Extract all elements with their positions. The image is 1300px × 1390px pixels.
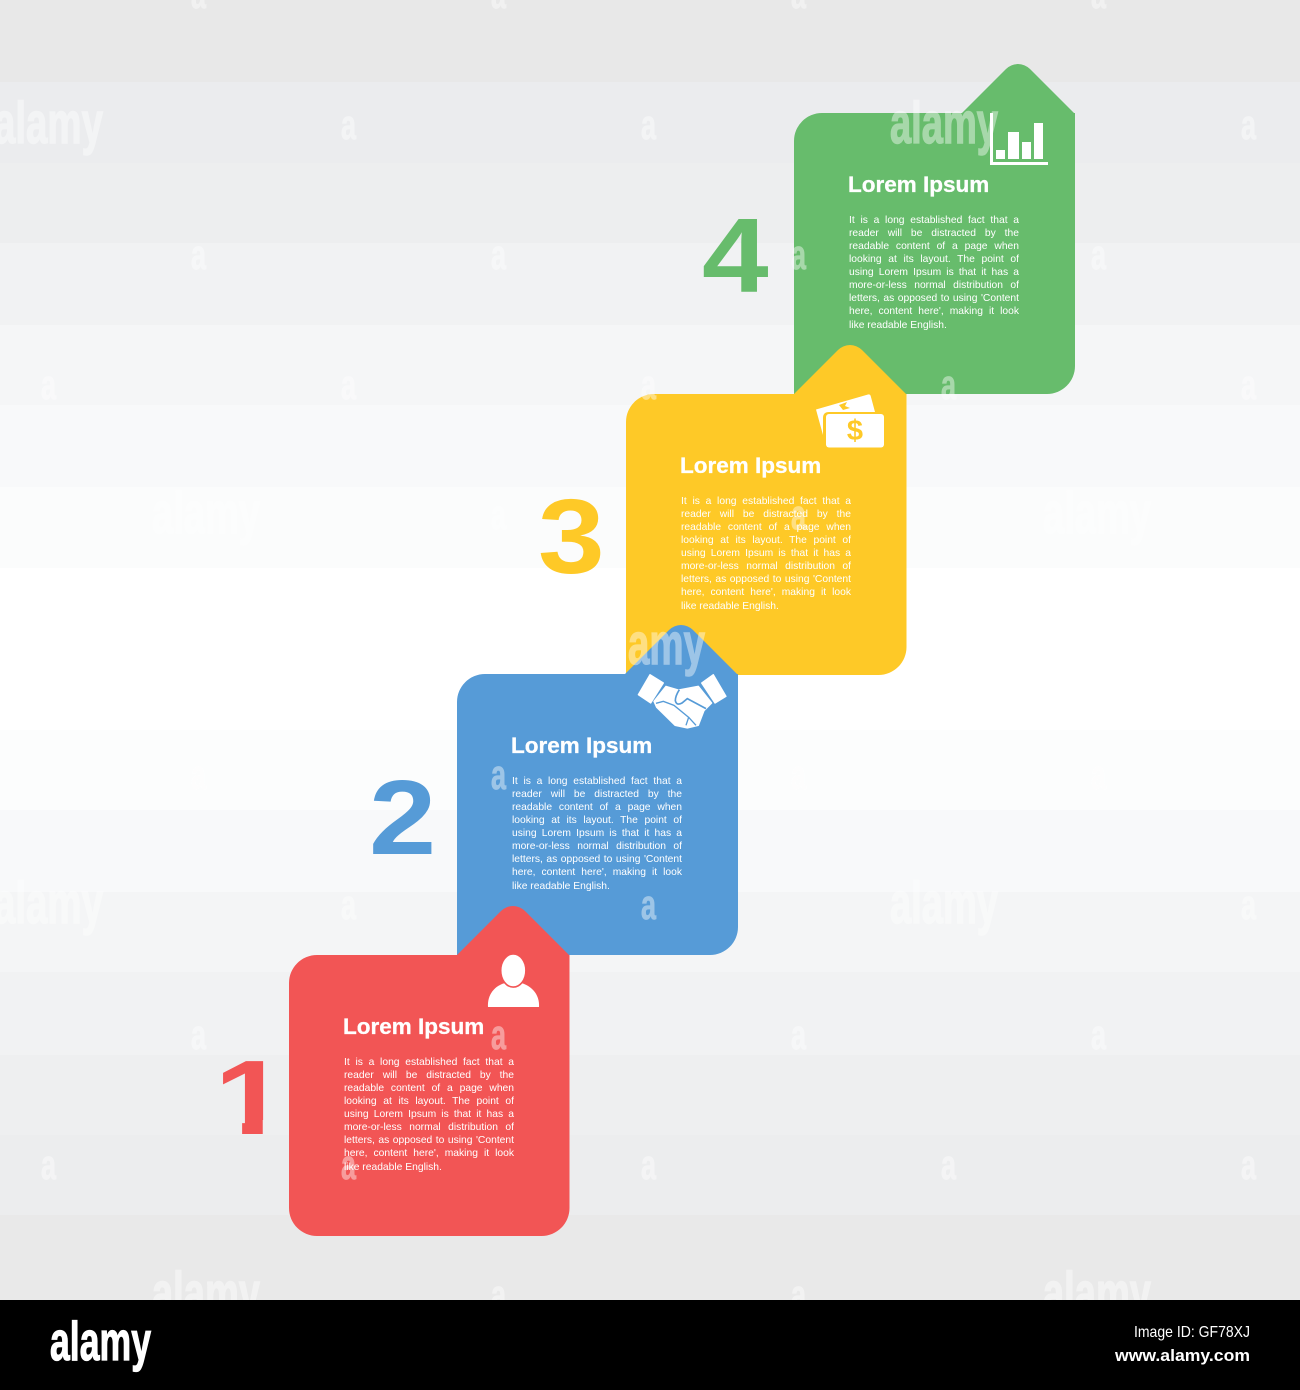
watermark layer: alamy [890,871,998,936]
body text: It is a long established fact that a [681,496,851,507]
watermark layer: a [791,231,806,278]
watermark layer: a [341,881,356,928]
watermark layer: a [791,1011,806,1058]
panel: step 4 green [794,64,1075,394]
watermark layer: a [641,1141,656,1188]
watermark layer: a [641,881,656,928]
body text: more-or-less normal distribution of [849,280,1019,291]
panel: step 2 blue [457,625,738,955]
icon: person [488,954,540,1007]
body text: like readable English. [849,320,947,331]
watermark layer: a [191,231,206,278]
body text: readable content of a page when [681,522,851,533]
body text [344,1057,514,1173]
number 2: 2 [369,759,436,877]
number 3: 3 [538,478,605,596]
watermark layer: a [1241,361,1256,408]
image id: Image ID: GF78XJ [1134,1324,1250,1341]
watermark layer: a [1091,231,1106,278]
shape: yellow card with arrow top [626,345,906,675]
watermark layer: alamy [890,91,998,156]
body text: looking at its layout. The point of [849,254,1019,265]
body text: looking at its layout. The point of [512,815,682,826]
watermark layer: a [191,1011,206,1058]
body text: like readable English. [344,1162,442,1173]
body text: reader will be distracted by the [512,789,682,800]
footer bar [0,1300,1300,1390]
body text: here, content here', making it look [681,587,851,598]
watermark layer: a [341,361,356,408]
watermark layer: a [41,1141,56,1188]
body text: more-or-less normal distribution of [681,561,851,572]
icon: bar chart [990,113,1048,165]
body text: more-or-less normal distribution of [512,841,682,852]
watermark layer: a [191,751,206,798]
watermark layer: a [641,361,656,408]
body text: reader will be distracted by the [849,228,1019,239]
footer logo: alamy [50,1310,151,1372]
watermark layer: a [791,751,806,798]
body text: readable content of a page when [512,802,682,813]
website: www.alamy.com [1114,1346,1250,1365]
watermark layer: a [941,621,956,668]
heading: Lorem Ipsum [343,1014,484,1039]
watermark layer: a [491,1011,506,1058]
watermark layer: a [1241,1141,1256,1188]
body text: using Lorem Ipsum is that it has a [344,1109,514,1120]
body text: It is a long established fact that a [849,215,1019,226]
icon: handshake [638,674,727,729]
watermark layer: a [41,621,56,668]
number 1: 1 [214,1039,288,1157]
watermark layer: a [1241,101,1256,148]
body text: letters, as opposed to using 'Content [344,1135,514,1146]
body text: letters, as opposed to using 'Content [512,854,682,865]
body text: readable content of a page when [849,241,1019,252]
body text: It is a long established fact that a [344,1057,514,1068]
watermark layer: a [491,491,506,538]
watermark layer: a [1091,751,1106,798]
body text: like readable English. [681,601,779,612]
body text: letters, as opposed to using 'Content [849,293,1019,304]
watermark layer: a [1241,621,1256,668]
body text: looking at its layout. The point of [681,535,851,546]
heading: Lorem Ipsum [680,453,821,478]
body text [681,496,851,612]
body text: reader will be distracted by the [344,1070,514,1081]
icon: banknotes: $ [847,415,863,447]
body text: using Lorem Ipsum is that it has a [849,267,1019,278]
watermark layer: alamy [152,481,260,546]
number 4: 4 [702,197,769,315]
watermark layer: a [1091,1011,1106,1058]
body text: using Lorem Ipsum is that it has a [681,548,851,559]
watermark layer: alamy [596,612,705,677]
watermark layer: a [341,621,356,668]
icon: banknotes [816,394,884,448]
watermark layer: a [941,1141,956,1188]
heading: Lorem Ipsum [511,733,652,758]
body text: using Lorem Ipsum is that it has a [512,828,682,839]
shape: blue card with arrow top [457,625,738,955]
watermark layer: a [1241,881,1256,928]
watermark layer: a [941,361,956,408]
shape: red card with arrow top [289,906,570,1236]
body text: letters, as opposed to using 'Content [681,574,851,585]
panel: step 1 red [289,906,570,1236]
watermark layer: a [41,361,56,408]
body text: readable content of a page when [344,1083,514,1094]
body text: here, content here', making it look [849,306,1019,317]
watermark layer: a [491,751,506,798]
watermark layer: alamy [1043,481,1151,546]
heading: Lorem Ipsum [848,172,989,197]
watermark layer: a [341,101,356,148]
body text [849,215,1019,331]
shape: green card with arrow top [794,64,1075,394]
body text: more-or-less normal distribution of [344,1122,514,1133]
panel: step 3 yellow [626,345,906,675]
body text [512,776,682,892]
body text: looking at its layout. The point of [344,1096,514,1107]
watermark layer: a [791,491,806,538]
watermark layer: a [641,101,656,148]
body text: here, content here', making it look [512,867,682,878]
body text: reader will be distracted by the [681,509,851,520]
body text: like readable English. [512,881,610,892]
watermark layer: a [341,1141,356,1188]
watermark layer: a [491,231,506,278]
body text: It is a long established fact that a [512,776,682,787]
body text: here, content here', making it look [344,1148,514,1159]
